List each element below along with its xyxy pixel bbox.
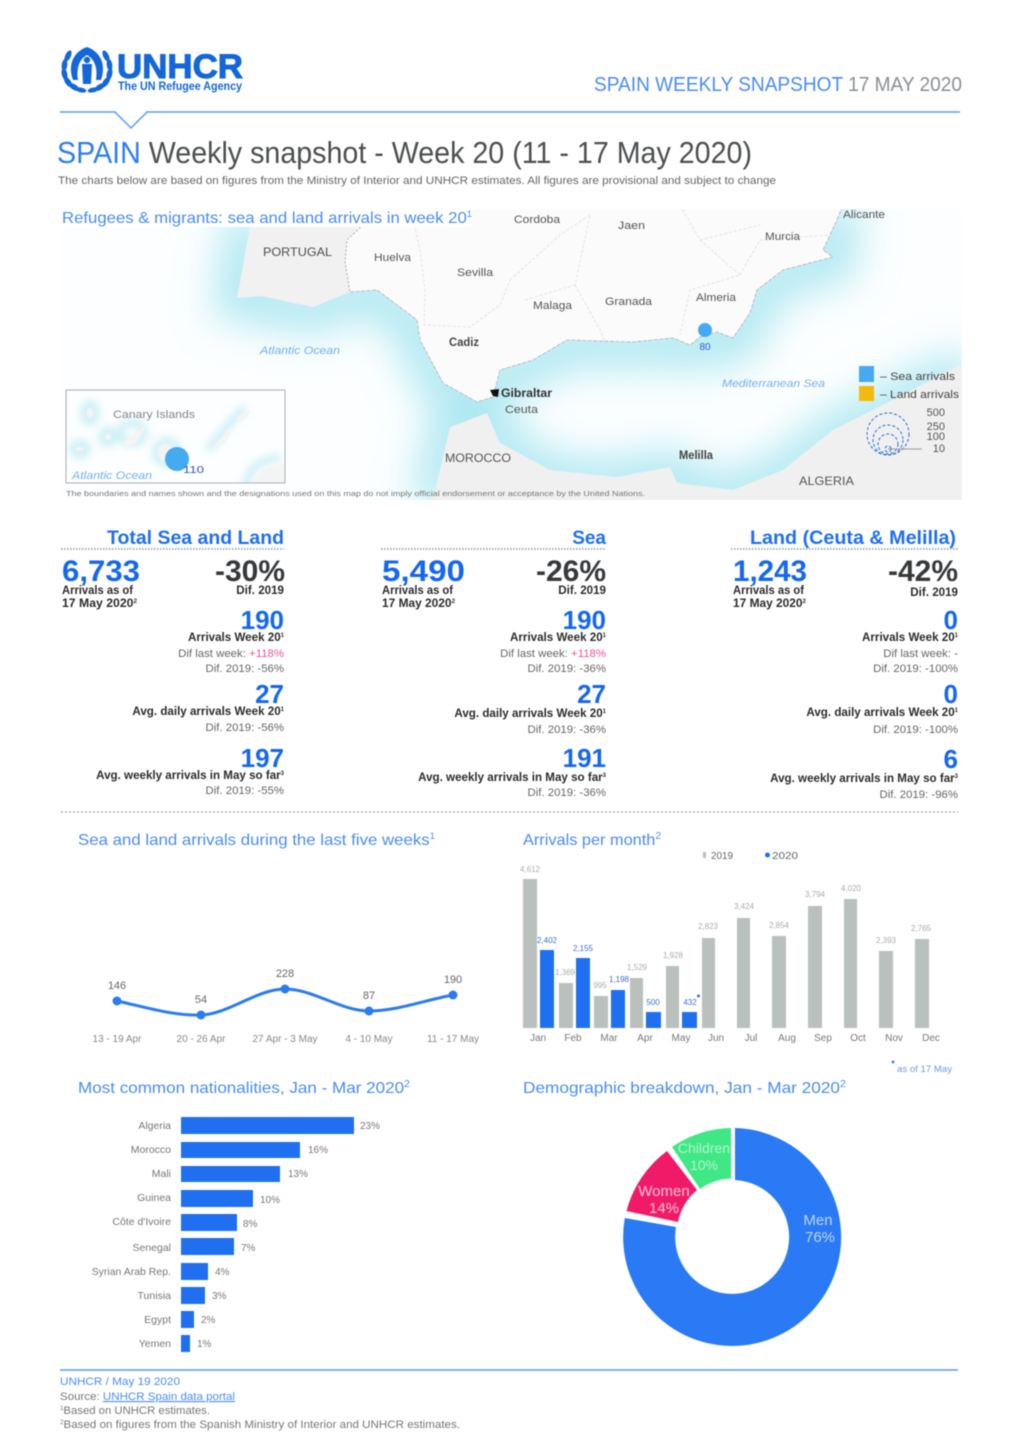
bar chart: arrivals per month: Aug [778, 1033, 796, 1044]
map legend: 500 [927, 407, 945, 419]
bar chart: arrivals per month: Apr [637, 1033, 653, 1044]
map label Murcia: Murcia [765, 231, 801, 243]
percent difference: Dif. 2019 [910, 586, 959, 599]
bar chart: arrivals per month: 3,794 [805, 890, 826, 899]
bar chart: nationalities: 23% [360, 1121, 380, 1132]
bar chart: arrivals per month: 500 [646, 998, 660, 1007]
arrivals week: Arrivals Week 20 [510, 631, 603, 644]
weekly arrivals: Dif. 2019: -36% [527, 787, 606, 799]
total arrivals: 2 [803, 599, 807, 605]
bar chart: nationalities: Senegal [132, 1242, 171, 1254]
land: Portugal [236, 226, 359, 308]
bar chart: arrivals per month: Dec [922, 1033, 940, 1044]
map label Sevilla: Sevilla [457, 267, 494, 279]
total arrivals: 6,733 [62, 555, 140, 588]
bar chart: arrivals per month: 2,402 [537, 936, 558, 945]
coast and borders [345, 205, 843, 402]
bar chart: nationalities: 16% [308, 1145, 328, 1156]
land: North Africa [425, 360, 970, 505]
bar chart: arrivals per month: 2,765 [911, 924, 932, 933]
arrivals week [178, 605, 285, 675]
bar chart: nationalities [92, 1117, 380, 1352]
weekly arrivals: Dif. 2019: -96% [879, 789, 958, 801]
inset: Canary Islands: Canary Islands [113, 409, 196, 421]
line chart: five weeks: 20 - 26 Apr [177, 1034, 226, 1045]
map label Melilla: Melilla [679, 448, 713, 462]
weekly arrivals: 3 [955, 774, 959, 780]
chart footnote [892, 1060, 953, 1074]
arrivals week: Arrivals Week 20 [862, 631, 955, 644]
arrivals week: 1 [603, 633, 607, 639]
bar chart: arrivals per month: Feb [564, 1033, 582, 1044]
bar chart: arrivals per month: Mar [600, 1033, 618, 1044]
footnote 2: 2 [60, 1420, 64, 1426]
arrivals week: Dif last week: +118% [178, 648, 284, 660]
arrivals week [500, 605, 607, 675]
footnote 2: Based on figures from the Spanish Ministry of Interior and UNHCR estimates. [64, 1419, 460, 1431]
daily arrivals: Dif. 2019: -36% [527, 724, 606, 736]
panel: Total Sea and Land [61, 528, 285, 797]
bar chart: nationalities: 10% [260, 1195, 280, 1206]
map label Huelva: Huelva [374, 252, 412, 264]
bar chart: nationalities: Mali [152, 1168, 171, 1180]
line chart: five weeks: 11 - 17 May [427, 1034, 479, 1045]
total arrivals: 17 May 2020 [62, 597, 130, 610]
arrivals week: Dif. 2019: -100% [873, 663, 958, 675]
heading: Sea [572, 528, 606, 549]
line chart: five weeks: 228 [276, 968, 294, 980]
arrivals week: 1 [955, 633, 959, 639]
weekly arrivals: Avg. weekly arrivals in May so far [418, 771, 603, 784]
bar chart: arrivals per month: Nov [885, 1033, 903, 1044]
daily arrivals [454, 679, 607, 736]
heading: Total Sea and Land [107, 528, 284, 549]
daily arrivals: Avg. daily arrivals Week 20 [132, 705, 281, 718]
weekly arrivals: Avg. weekly arrivals in May so far [770, 772, 955, 785]
donut chart: demographics [623, 1128, 841, 1346]
total arrivals: 5,490 [382, 555, 465, 588]
daily arrivals: Dif. 2019: -100% [873, 724, 958, 736]
weekly arrivals: 191 [563, 743, 606, 773]
line chart: five weeks: 4 - 10 May [345, 1034, 393, 1045]
map label Portugal: PORTUGAL [263, 245, 332, 259]
segment: men [623, 1128, 841, 1346]
bar chart: nationalities: 4% [215, 1267, 230, 1278]
weekly arrivals [418, 743, 607, 799]
bar chart: arrivals per month: Jan [530, 1033, 546, 1044]
subtitle: The charts below are based on figures from the Ministry of Interior and UNHCR estimates. All figures are provisional and subject to change [58, 175, 776, 187]
total arrivals: Arrivals as of [733, 584, 804, 597]
bar chart: nationalities: Egypt [144, 1314, 171, 1326]
arrivals week [862, 605, 959, 675]
map legend: – Sea arrivals [880, 371, 956, 383]
heading: nationalities: Most common nationalities, Jan - Mar 2020 [78, 1080, 384, 1097]
map label Gibraltar: Gibraltar [501, 386, 552, 400]
land: Spain [345, 205, 843, 402]
bar chart: nationalities: 1% [197, 1339, 212, 1350]
bar chart: nationalities: 2% [201, 1315, 216, 1326]
percent difference: -26% [536, 555, 606, 588]
bar chart: arrivals per month: 1,369 [555, 968, 576, 977]
bar chart: nationalities: Algeria [138, 1120, 171, 1132]
bar chart: arrivals per month: 2,155 [573, 944, 594, 953]
weekly arrivals: 3 [603, 773, 607, 779]
bar chart: nationalities: 8% [243, 1219, 258, 1230]
bubble: Canary sea arrivals [165, 447, 205, 476]
footer credit: UNHCR / May 19 2020 [60, 1376, 180, 1388]
bar chart: arrivals per month: 4,612 [520, 865, 541, 874]
weekly arrivals [770, 744, 959, 801]
heading: nationalities: 2 [404, 1079, 410, 1090]
logo tagline: The UN Refugee Agency [118, 81, 243, 93]
daily arrivals: 27 [577, 679, 606, 709]
percent difference: Dif. 2019 [236, 584, 285, 597]
bar chart: nationalities: 3% [212, 1291, 227, 1302]
map label Morocco: MOROCCO [445, 451, 511, 465]
segment: children: 10% [690, 1157, 718, 1173]
bar chart: arrivals per month: 3,424 [734, 902, 755, 911]
segment: women: Women [638, 1183, 690, 1200]
heading: demographics: Demographic breakdown, Jan - Mar 2020 [523, 1080, 817, 1097]
map label Mediterranean Sea: Mediterranean Sea [722, 378, 825, 390]
arrivals week: 0 [944, 605, 958, 635]
line chart: five weeks: 13 - 19 Apr [93, 1034, 142, 1045]
footnote 1: Based on UNHCR estimates. [63, 1405, 210, 1417]
total arrivals: 2 [133, 599, 138, 605]
bar chart: arrivals per month: 4,020 [841, 884, 862, 893]
map legend: 250 [927, 421, 945, 433]
arrivals week: 190 [241, 605, 284, 635]
line chart: five weeks: 146 [108, 980, 126, 992]
bar chart: arrivals per month: Oct [850, 1033, 866, 1044]
daily arrivals: 1 [955, 708, 959, 714]
daily arrivals: Avg. daily arrivals Week 20 [454, 707, 603, 720]
heading: five weeks chart: Sea and land arrivals during the last five weeks [78, 832, 412, 849]
arrivals week: Arrivals Week 20 [188, 631, 281, 644]
map label Alicante: Alicante [843, 209, 885, 221]
chart legend: 2019 [711, 851, 733, 862]
arrivals week: Dif last week: +118% [500, 648, 606, 660]
total arrivals [382, 555, 465, 610]
heading: five weeks chart: 1 [430, 831, 435, 841]
total arrivals [733, 555, 807, 610]
weekly arrivals: 6 [944, 744, 958, 774]
segment: children: Children [678, 1140, 730, 1156]
map heading: 1 [467, 209, 472, 219]
title: SPAIN Weekly snapshot - Week 20 (11 - 17 May 2020) [57, 135, 752, 170]
bar chart: nationalities: Syrian Arab Rep. [92, 1266, 171, 1278]
map label Granada: Granada [605, 296, 653, 308]
bar chart: nationalities: Guinea [137, 1192, 171, 1204]
line chart: five weeks: 27 Apr - 3 May [252, 1034, 318, 1045]
heading: arrivals per month: 2 [655, 831, 661, 842]
arrivals week: Dif last week: - [883, 648, 958, 660]
bar chart: nationalities: Morocco [131, 1144, 171, 1156]
map disclaimer: The boundaries and names shown and the designations used on this map do not imply official endorsement or acceptance by the United Nations. [66, 491, 645, 498]
daily arrivals [132, 679, 285, 734]
chart legend [703, 851, 799, 862]
bubble: Canary sea arrivals: 110 [183, 465, 205, 476]
map legend: 100 [927, 431, 945, 443]
weekly arrivals: Avg. weekly arrivals in May so far [96, 769, 281, 782]
line chart: five weeks: 87 [363, 990, 375, 1002]
header rule with notch [60, 112, 960, 128]
heading: demographics: 2 [840, 1079, 846, 1090]
bar chart: arrivals per month: 1,928 [663, 951, 684, 960]
panel: Land [731, 528, 959, 801]
bubble: Almeria sea arrivals: 80 [699, 342, 711, 353]
map heading: Refugees & migrants: sea and land arrivals in week 20 [62, 210, 449, 227]
map label Jaen: Jaen [618, 220, 645, 232]
total arrivals: 17 May 2020 [733, 597, 801, 610]
heading: Land (Ceuta & Melilla) [750, 528, 956, 549]
bubble: Almeria sea arrivals [698, 323, 712, 353]
weekly arrivals: 197 [241, 743, 284, 773]
panel: Sea [381, 528, 607, 799]
arrivals week: Dif. 2019: -56% [205, 663, 284, 675]
footer [60, 1370, 958, 1431]
map label Cadiz: Cadiz [449, 335, 479, 349]
bar chart: nationalities: 13% [288, 1169, 308, 1180]
daily arrivals: Dif. 2019: -56% [205, 722, 284, 734]
bar chart: arrivals per month: 2,393 [876, 936, 897, 945]
line chart: five weeks: 54 [195, 994, 207, 1006]
daily arrivals: 0 [944, 679, 958, 709]
bar chart: nationalities: Tunisia [138, 1290, 171, 1302]
icon: UNHCR emblem [61, 47, 113, 93]
line chart: five weeks: 190 [444, 974, 462, 986]
inset: Canary Islands: Atlantic Ocean [71, 470, 152, 482]
daily arrivals: Avg. daily arrivals Week 20 [806, 706, 955, 719]
map label Ceuta: Ceuta [505, 404, 539, 416]
daily arrivals [806, 679, 959, 736]
map legend [859, 366, 960, 455]
panel: map [60, 205, 970, 505]
bar chart: arrivals per month: 995 [593, 981, 607, 990]
chart legend: 2020 [772, 851, 799, 862]
segment: men: Men [803, 1212, 833, 1229]
weekly arrivals: 3 [281, 771, 285, 777]
total arrivals: 2 [452, 599, 456, 605]
weekly arrivals: Dif. 2019: -55% [205, 785, 284, 797]
chart footnote: as of 17 May [897, 1064, 953, 1074]
map label Algeria: ALGERIA [799, 474, 854, 488]
bar chart: arrivals per month: Jun [708, 1033, 724, 1044]
total arrivals: Arrivals as of [382, 584, 453, 597]
arrivals week: Dif. 2019: -36% [527, 663, 606, 675]
bar chart: nationalities: 7% [241, 1243, 256, 1254]
daily arrivals: 1 [281, 707, 285, 713]
total arrivals: Arrivals as of [62, 584, 133, 597]
map label Atlantic Ocean: Atlantic Ocean [259, 345, 340, 357]
segment: children [672, 1128, 731, 1189]
bar chart: arrivals per month: Sep [814, 1033, 832, 1044]
map legend: – Land arrivals [880, 389, 960, 401]
percent difference: -30% [215, 555, 285, 588]
percent difference: -42% [888, 555, 958, 588]
line chart: five weeks [93, 968, 479, 1045]
sea glow along coast [237, 205, 970, 505]
heading: arrivals per month: Arrivals per month [523, 832, 653, 849]
footnote 1: 1 [60, 1406, 64, 1412]
bar chart: arrivals per month: 2,854 [769, 921, 790, 930]
icon: Gibraltar marker [490, 389, 499, 397]
bar chart: arrivals per month [520, 851, 953, 1074]
map label Malaga: Malaga [533, 300, 573, 312]
map label Cordoba: Cordoba [514, 214, 561, 226]
logo wordmark: UNHCR [117, 48, 243, 86]
total arrivals: 1,243 [733, 555, 807, 588]
percent difference: Dif. 2019 [558, 584, 607, 597]
bar chart: arrivals per month: 2,823 [698, 922, 719, 931]
weekly arrivals [96, 743, 285, 797]
map label Almeria: Almeria [696, 292, 737, 304]
segment: women [626, 1151, 697, 1222]
segment: women: 14% [649, 1200, 679, 1217]
bar chart: arrivals per month: Jul [745, 1033, 757, 1044]
UNHCR logo [61, 47, 243, 93]
header label: SPAIN WEEKLY SNAPSHOT 17 MAY 2020 [594, 74, 962, 96]
bar chart: arrivals per month: 432 [683, 998, 697, 1007]
arrivals week: 1 [281, 633, 285, 639]
bar chart: arrivals per month: 1,529 [627, 963, 648, 972]
bar chart: arrivals per month: 1,198 [609, 975, 630, 984]
total arrivals [62, 555, 140, 610]
bar chart: nationalities: Yemen [139, 1338, 171, 1350]
arrivals week: 190 [563, 605, 606, 635]
inset: Canary Islands [65, 389, 286, 484]
total arrivals: 17 May 2020 [382, 597, 450, 610]
bar chart: arrivals per month: May [672, 1033, 690, 1044]
bar chart: nationalities: Côte d'Ivoire [112, 1216, 171, 1228]
daily arrivals: 27 [255, 679, 284, 709]
map legend: 10 [933, 443, 945, 455]
daily arrivals: 1 [603, 709, 607, 715]
segment: men: 76% [805, 1229, 835, 1246]
footer source: Source: UNHCR Spain data portal [60, 1391, 235, 1403]
